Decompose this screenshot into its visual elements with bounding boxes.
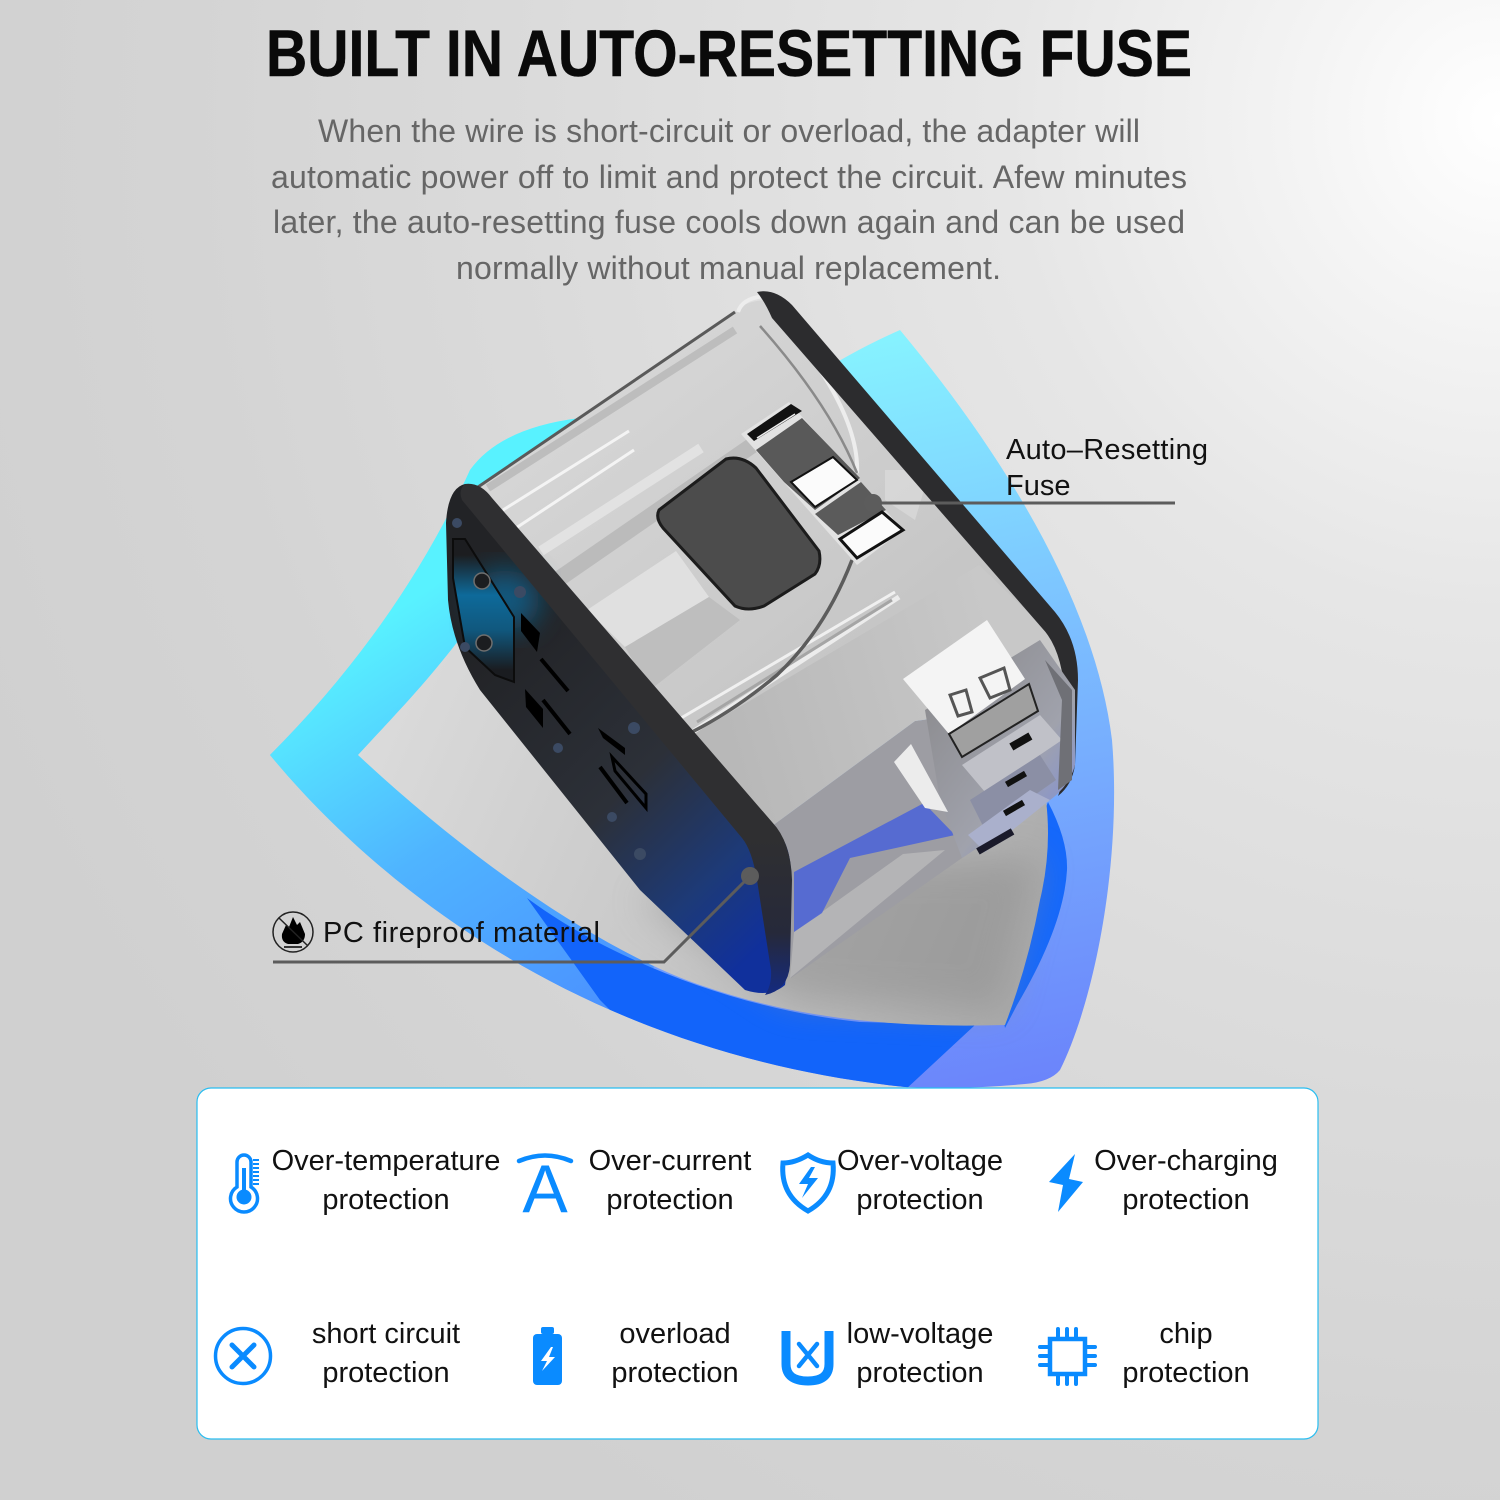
icon: no fire [273, 912, 313, 952]
label: over-temperature: protection [322, 1184, 450, 1216]
title: BUILT IN AUTO-RESETTING FUSE [266, 16, 1192, 90]
top face lower panel [692, 565, 1068, 826]
USB port [894, 620, 1038, 854]
charging pad [658, 458, 820, 609]
glass corner highlight [738, 296, 857, 473]
description text [271, 113, 1187, 286]
socket holes [474, 573, 492, 651]
fuse component [741, 402, 903, 565]
description text: normally without manual replacement. [456, 250, 1001, 286]
face blue tint [470, 570, 540, 630]
top face stripes [488, 326, 930, 735]
icon: ampere: A [522, 1151, 568, 1227]
top-left glass edge [478, 312, 735, 487]
top right black rim [757, 291, 1078, 796]
device blue reflection [794, 803, 955, 932]
icon: low voltage U [786, 1331, 829, 1381]
callout: PC fireproof material [273, 867, 759, 962]
socket outlet [453, 539, 514, 682]
icon: battery [533, 1327, 562, 1385]
callout: auto-resetting fuse: Auto–Resetting [1006, 434, 1208, 466]
callout: auto-resetting fuse: Fuse [1006, 470, 1070, 502]
callout: auto-resetting fuse [864, 434, 1208, 512]
label: short circuit: short circuit [312, 1318, 460, 1350]
face screws [452, 518, 646, 860]
shield inner area [358, 625, 1048, 1026]
label: over-voltage: protection [856, 1184, 984, 1216]
label: short circuit: protection [322, 1357, 450, 1389]
description text: later, the auto-resetting fuse cools down again and can be used [273, 204, 1185, 240]
description text: automatic power off to limit and protect the circuit. Afew minutes [271, 159, 1187, 195]
device shadow [640, 860, 1040, 1010]
shield right deep blue band [1000, 802, 1067, 1028]
icon: thermometer [230, 1155, 259, 1212]
description text: When the wire is short-circuit or overload, the adapter will [318, 113, 1140, 149]
icon: chip [1040, 1329, 1095, 1384]
label: low-voltage: protection [856, 1357, 984, 1389]
label: overload: protection [611, 1357, 739, 1389]
label: overload: overload [619, 1318, 731, 1350]
device lower clear body [772, 700, 1075, 978]
protection panel [197, 1088, 1318, 1439]
black rim band [461, 484, 792, 995]
icon: shield bolt [783, 1155, 833, 1211]
callout: PC fireproof material: PC fireproof material [323, 917, 600, 949]
adapter device [446, 291, 1078, 995]
label: over-voltage: Over-voltage [837, 1145, 1003, 1177]
socket slots [521, 613, 646, 808]
label: over-current: Over-current [589, 1145, 751, 1177]
icon: lightning bolt [1049, 1154, 1083, 1212]
label: chip: protection [1122, 1357, 1250, 1389]
lower body light panel [790, 850, 945, 978]
front black face [446, 484, 791, 993]
device top face [478, 300, 1070, 826]
label: over-current: protection [606, 1184, 734, 1216]
shield deep blue band [527, 898, 975, 1090]
USB glass stack [925, 640, 1075, 858]
label: chip: chip [1159, 1318, 1213, 1350]
icon: x circle [216, 1328, 270, 1384]
label: over-temperature: Over-temperature [272, 1145, 500, 1177]
label: over-charging: protection [1122, 1184, 1250, 1216]
label: low-voltage: low-voltage [847, 1318, 993, 1350]
label: over-charging: Over-charging [1094, 1145, 1278, 1177]
shield graphic [260, 320, 1130, 1100]
